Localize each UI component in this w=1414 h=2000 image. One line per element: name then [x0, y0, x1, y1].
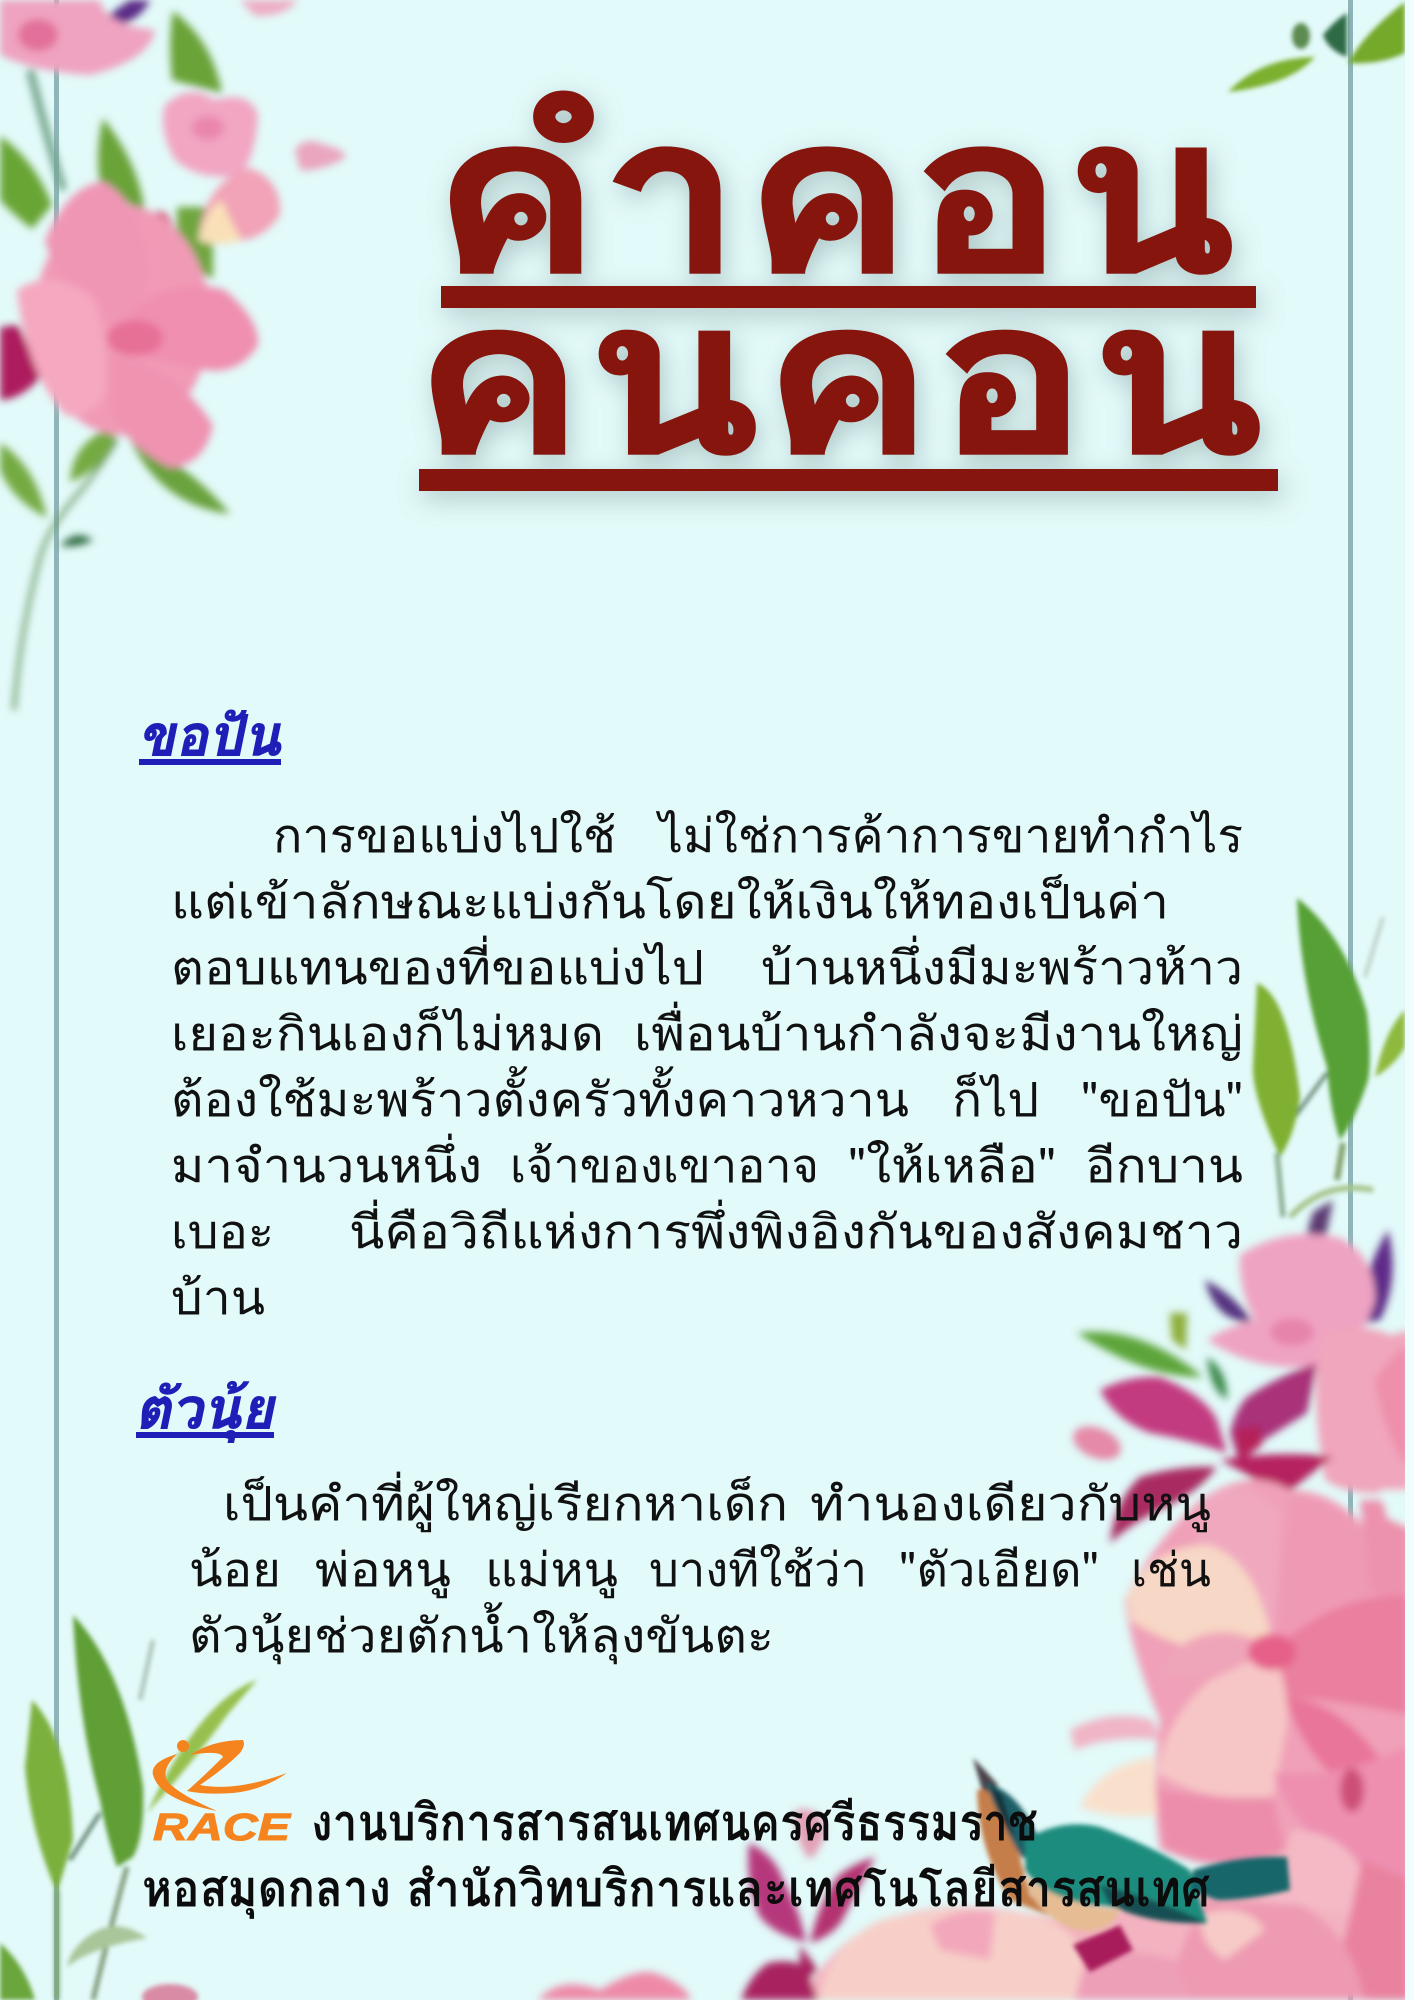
stems: [1277, 917, 1383, 1217]
floral decoration: top right leaves: [1228, 2, 1405, 92]
text block: ขอปัน description: "ขอปัน": [1081, 1062, 1243, 1137]
small flower and bud: [163, 92, 345, 244]
text block: ขอปัน description: ไม่ใช่การค้าการขายทำกำไร: [655, 798, 1243, 873]
heading: ขอปัน: ขอปัน: [138, 691, 282, 780]
text block: ขอปัน description: ก็ไป: [952, 1062, 1039, 1137]
stems: [57, 1640, 153, 2000]
magenta petals left of bird: [741, 1809, 875, 2000]
lower petals: [538, 1716, 1410, 2000]
text block: ขอปัน description: [171, 798, 1243, 1335]
text block: ขอปัน description: เจ้าของเขาอาจ: [510, 1128, 819, 1203]
title underline 2: [419, 469, 1278, 491]
text block: ตัวนุ้ย description: บางทีใช้ว่า: [649, 1532, 867, 1607]
green leaf cluster: [1077, 1313, 1227, 1400]
text block: ขอปัน description: ต้องใช้มะพร้าวตั้งครัวทั้งคาวหวาน: [171, 1062, 909, 1137]
lower petals base: [800, 1845, 1410, 2000]
title underline 1: [441, 286, 1256, 308]
text block: ขอปัน description: นี่คือวิถีแห่งการพึ่งพิงอิงกันของสังคมชาว: [349, 1194, 1243, 1269]
text block: ขอปัน description: บ้าน: [171, 1260, 265, 1335]
magenta and purple petals: [0, 0, 150, 400]
text block: ตัวนุ้ย description: ทำนองเดียวกับหนู: [810, 1466, 1211, 1541]
text block: ตัวนุ้ย description: ตัวนุ้ยช่วยตักน้ำให้ลุงขันตะ: [189, 1598, 774, 1673]
text block: ขอปัน description: ตอบแทนของที่ขอแบ่งไป: [171, 930, 704, 1005]
top flower with purple tips: [1205, 1200, 1392, 1367]
stems: [14, 70, 117, 710]
text block: ขอปัน description: มาจำนวนหนึ่ง: [171, 1128, 482, 1203]
text block: ตัวนุ้ย description: เช่น: [1131, 1532, 1211, 1607]
floral decoration: left bottom leaves: [0, 1615, 257, 2000]
floral decoration: bottom right flowers: [538, 1200, 1410, 2000]
text block: ขอปัน description: บ้านหนึ่งมีมะพร้าวห้าว: [761, 930, 1243, 1005]
footer text: [142, 1783, 1210, 1928]
leaves: [0, 1615, 257, 2000]
title line 1: คำคอน: [431, 19, 1237, 370]
right margin strip: [1405, 0, 1414, 2000]
magenta petals: [1068, 1363, 1333, 1543]
big flower: [17, 182, 258, 468]
text block: ขอปัน description: เบอะ: [171, 1194, 274, 1269]
leaves: [1253, 898, 1405, 1157]
big flower base: [1125, 1480, 1410, 1880]
text block: ขอปัน description: เพื่อนบ้านกำลังจะมีงานใหญ่: [634, 996, 1243, 1071]
title: [412, 19, 1278, 549]
second flower, right edge: [1316, 1328, 1410, 1493]
right vertical line: [1348, 0, 1353, 2000]
left vertical line: [54, 0, 59, 2000]
heading: ตัวนุ้ย: ตัวนุ้ย: [135, 1364, 276, 1453]
logo: RACE: [153, 1740, 292, 1849]
text block: ตัวนุ้ย description: "ตัวเอียด": [899, 1532, 1099, 1607]
floral decoration: right side leaves: [1253, 898, 1405, 1217]
text block: ตัวนุ้ย description: เป็นคำที่ผู้ใหญ่เรียกหาเด็ก: [223, 1466, 788, 1541]
big flower: [1127, 1487, 1410, 1799]
text block: ขอปัน description: "ให้เหลือ": [848, 1128, 1056, 1203]
icon: kingfisher bird: [973, 1758, 1290, 1972]
text block: ตัวนุ้ย description: น้อย: [189, 1532, 281, 1607]
text block: ขอปัน description: แต่เข้าลักษณะแบ่งกันโดยให้เงินให้ทองเป็นค่า: [171, 864, 1169, 939]
title line 2: คนคอน: [412, 205, 1265, 549]
logo: RACE: RACE: [153, 1807, 292, 1849]
text block: ตัวนุ้ย description: แม่หนู: [485, 1532, 618, 1607]
text block: ตัวนุ้ย description: [189, 1466, 1211, 1673]
floral decoration: top left: [0, 0, 345, 710]
footer text: หอสมุดกลาง สำนักวิทบริการและเทศโนโลยีสารสนเทศ: [142, 1849, 1210, 1928]
text block: ขอปัน description: การขอแบ่งไปใช้: [273, 798, 616, 873]
text block: ขอปัน description: เยอะกินเองก็ไม่หมด: [171, 996, 604, 1071]
fallen petal: [142, 1984, 198, 2000]
leaves: [0, 11, 230, 546]
text block: ขอปัน description: อีกบาน: [1085, 1128, 1243, 1203]
footer text: งานบริการสารสนเทศนครศรีธรรมราช: [311, 1783, 1038, 1862]
text block: ตัวนุ้ย description: พ่อหนู: [315, 1532, 451, 1607]
top flower: [0, 0, 298, 75]
